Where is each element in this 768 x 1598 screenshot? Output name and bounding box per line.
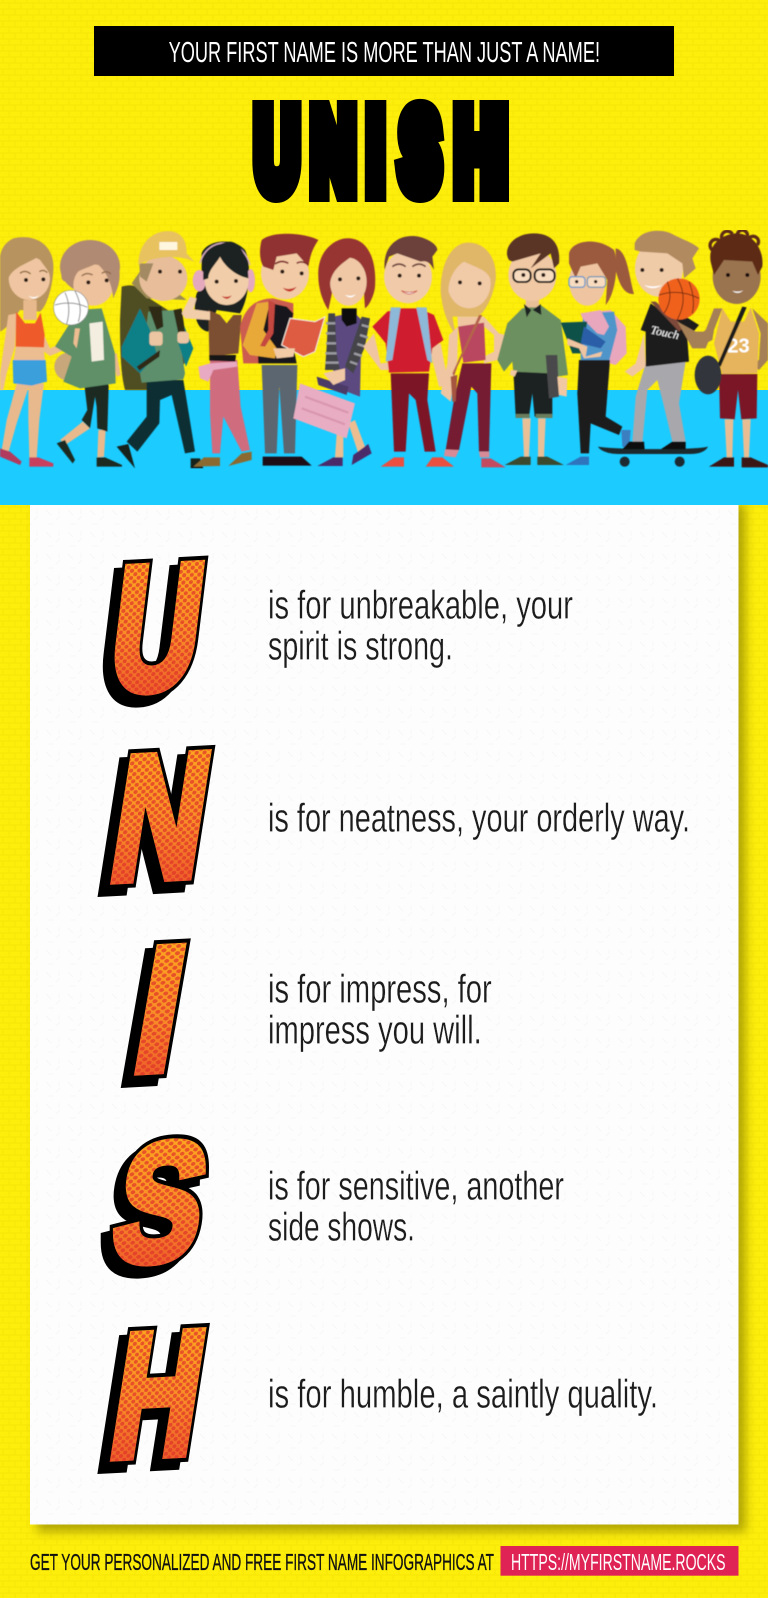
person: girl with orange top (0, 237, 80, 467)
illustration: group of twelve young people (0, 230, 768, 468)
person: girl in green jacket with volleyball (54, 240, 122, 467)
comic letter H: H (100, 1293, 216, 1494)
comic letter U: U (92, 535, 204, 737)
person: boy with glasses and green sweater (497, 233, 568, 465)
right six people (363, 230, 768, 467)
comic letter I: I (113, 917, 189, 1117)
person: girl with headphones (182, 242, 255, 467)
left six people (0, 231, 375, 468)
text: I meaning (268, 968, 492, 1052)
person: boy in yellow tank top number 23: 23 (727, 336, 750, 358)
comic letter S: S (102, 1107, 220, 1297)
text: S meaning: side shows. (268, 1206, 415, 1250)
comic letter I: I (122, 909, 198, 1109)
comic letter U: U (101, 527, 213, 729)
comic letter H: H (100, 1293, 216, 1494)
comic letter S: S (93, 1115, 211, 1305)
title: name: UNISH (255, 89, 499, 215)
comic letter S: S (102, 1107, 220, 1297)
white content panel (30, 505, 738, 1524)
comic letter N: N (100, 715, 222, 918)
comic letter S: S (102, 1107, 220, 1297)
header banner (94, 26, 674, 76)
comic letter U: U (101, 527, 213, 729)
person: backpacker with yellow cap (117, 231, 203, 468)
person: boy reading orange book (240, 234, 325, 466)
person: blonde girl with shoulder bag (441, 243, 506, 467)
text: U meaning (268, 583, 573, 668)
comic letter H: H (100, 1293, 216, 1494)
person: girl with ponytail and blue glasses (561, 242, 634, 465)
person: skateboarder with basketball: Touch (649, 323, 681, 342)
text: I meaning: is for impress, for (268, 968, 492, 1012)
person: skateboarder with basketball (598, 231, 712, 467)
person: boy in red t-shirt (363, 236, 454, 467)
text: S meaning: is for sensitive, another (268, 1164, 564, 1208)
text: U meaning: spirit is strong. (268, 624, 453, 668)
text: I meaning: impress you will. (268, 1008, 482, 1052)
comic letter U: U (101, 527, 213, 729)
comic letter N: N (100, 715, 222, 918)
text: S meaning (268, 1164, 564, 1250)
comic letter I: I (122, 909, 198, 1109)
comic letter N: N (91, 723, 213, 926)
person: red-haired girl with pink bag (293, 238, 375, 466)
comic letter I: I (122, 909, 198, 1109)
comic letter N: N (100, 715, 222, 918)
person: boy in yellow tank top number 23 (692, 230, 768, 467)
blue floor band (0, 390, 768, 505)
comic letter H: H (91, 1301, 207, 1502)
card shadow (37, 505, 746, 1532)
text: U meaning: is for unbreakable, your (268, 583, 573, 627)
